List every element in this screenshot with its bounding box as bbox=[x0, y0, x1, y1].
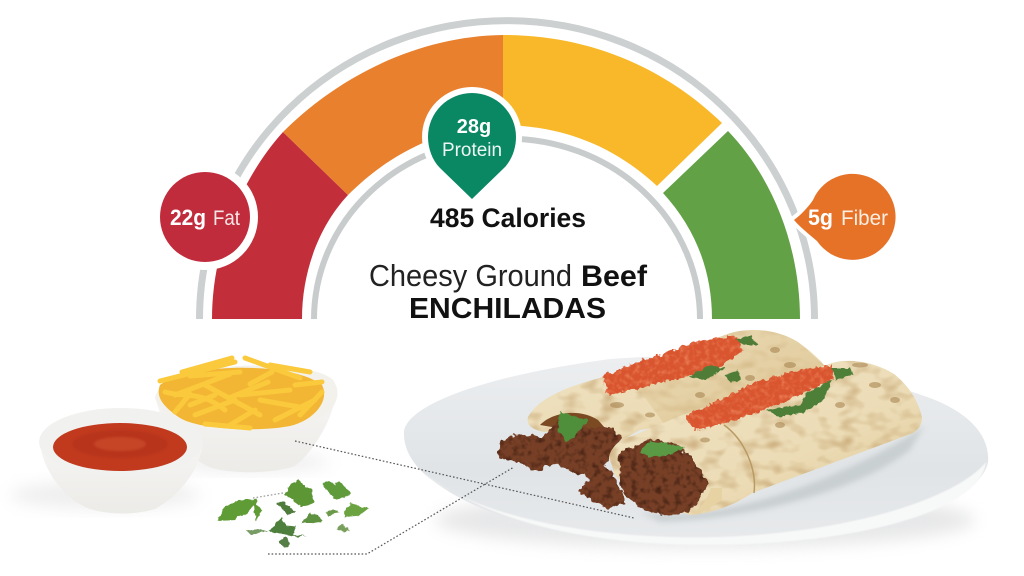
enchiladas bbox=[498, 330, 922, 515]
callout: protein: Protein bbox=[442, 140, 502, 161]
gauge bbox=[200, 21, 814, 319]
callout: fat: 22g bbox=[170, 205, 206, 230]
title: Cheesy Ground bbox=[369, 258, 572, 293]
tortilla browning spots bbox=[610, 347, 900, 442]
front enchilada bbox=[609, 361, 922, 515]
segment: red bbox=[212, 132, 348, 319]
callout: fiber bbox=[794, 174, 896, 260]
title: Beef bbox=[581, 260, 648, 293]
segment: green bbox=[663, 131, 800, 319]
dotted leader lines bbox=[253, 441, 634, 554]
outer gray arc bbox=[200, 21, 814, 319]
callout: fiber: Fiber bbox=[841, 207, 888, 230]
bowl: shredded cheese bbox=[155, 358, 337, 472]
callout: fiber: 5g bbox=[808, 205, 833, 230]
bowl: red sauce bbox=[10, 408, 203, 514]
title: ENCHILADAS bbox=[409, 293, 606, 325]
inner gray arc bbox=[314, 139, 700, 319]
segment: yellow bbox=[503, 35, 722, 186]
callout: protein: 28g bbox=[457, 116, 491, 138]
icon: large parsley leaf bbox=[217, 499, 262, 522]
plate bbox=[404, 357, 988, 548]
loose meat bbox=[578, 465, 626, 508]
herbs garnish bbox=[217, 479, 369, 548]
segment: orange bbox=[283, 35, 503, 195]
title bbox=[369, 258, 648, 325]
back enchilada bbox=[498, 330, 825, 478]
callout: protein bbox=[428, 93, 516, 199]
calories label: 485 Calories bbox=[430, 203, 586, 233]
callout: fat: Fat bbox=[213, 207, 240, 230]
callout: fat bbox=[152, 164, 258, 270]
